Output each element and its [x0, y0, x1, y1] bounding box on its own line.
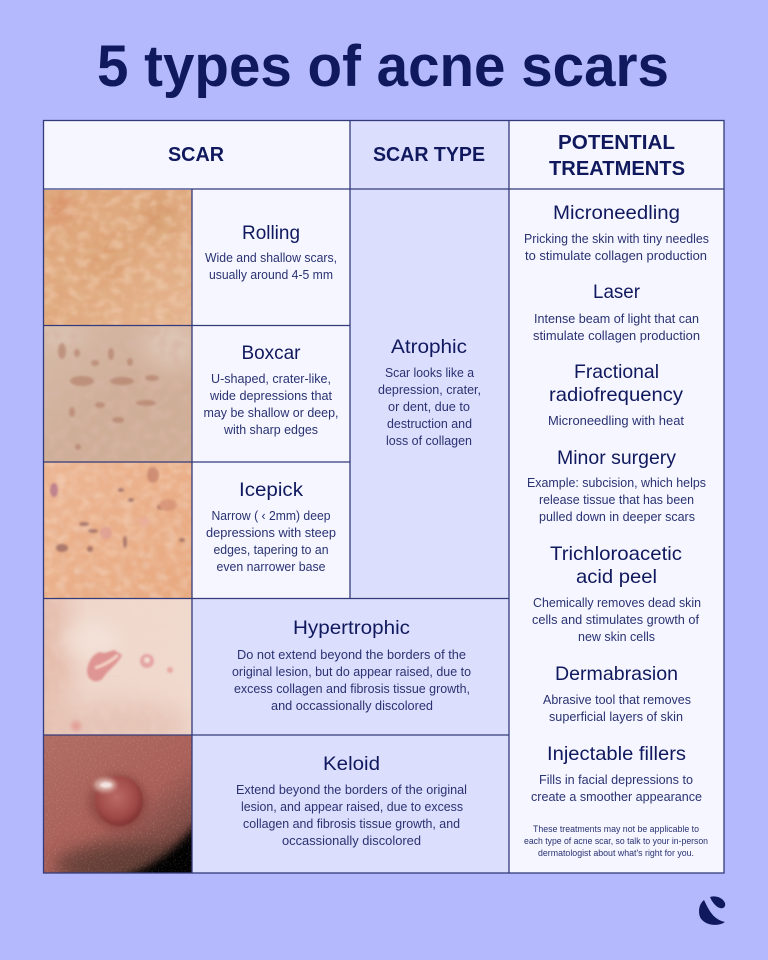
- treatment: minor surgery: release tissue that has been: [539, 493, 694, 507]
- grid lines: [43, 120, 724, 873]
- text: hypertrophic: excess collagen and fibrosis tissue growth,: [234, 682, 470, 696]
- treatment: dermabrasion: Dermabrasion: [555, 663, 678, 685]
- text: keloid: collagen and fibrosis tissue growth, and: [243, 817, 460, 831]
- text: icepick: depressions with steep: [206, 526, 336, 540]
- treatment: laser: Laser: [593, 281, 640, 303]
- header: scar type: SCAR TYPE: [373, 144, 485, 166]
- text: boxcar: U-shaped, crater-like,: [211, 372, 331, 386]
- text: hypertrophic: [232, 617, 471, 713]
- treatment: injectable fillers: create a smoother appearance: [531, 790, 702, 804]
- text: icepick: Narrow ( ‹ 2mm) deep: [212, 509, 331, 523]
- text: rolling: [205, 222, 337, 282]
- footnote: [524, 824, 708, 858]
- treatment: microneedling: Pricking the skin with tiny needles: [524, 232, 709, 246]
- text: keloid: occassionally discolored: [282, 834, 421, 848]
- treatment: trichloroacetic acid peel: Chemically removes dead skin: [533, 596, 701, 610]
- footnote: These treatments may not be applicable to: [533, 824, 699, 834]
- photo: keloid scar: [44, 736, 192, 872]
- header: potential treatments: TREATMENTS: [549, 158, 685, 180]
- text: hypertrophic: original lesion, but do appear raised, due to: [232, 665, 471, 679]
- treatment: laser: Intense beam of light that can: [534, 312, 699, 326]
- photo: hypertrophic scar: [44, 599, 192, 734]
- title: 5 types of acne scars: [97, 34, 669, 99]
- treatment: trichloroacetic acid peel: cells and stimulates growth of: [532, 613, 700, 627]
- treatment: dermabrasion: superficial layers of skin: [549, 710, 683, 724]
- header: potential treatments: [549, 132, 685, 180]
- treatment: trichloroacetic acid peel: Trichloroacetic: [550, 543, 682, 565]
- treatment: laser: stimulate collagen production: [533, 329, 700, 343]
- treatment: injectable fillers: Fills in facial depressions to: [539, 773, 693, 787]
- treatment: dermabrasion: [543, 663, 691, 724]
- treatment: laser: [533, 281, 700, 343]
- photo: rolling scar: [36, 190, 192, 326]
- treatment: microneedling: to stimulate collagen production: [525, 249, 707, 263]
- treatment: trichloroacetic acid peel: acid peel: [576, 566, 657, 588]
- header: scar: SCAR: [168, 144, 225, 166]
- header: potential treatments: POTENTIAL: [558, 132, 675, 154]
- text: atrophic: loss of collagen: [386, 434, 472, 448]
- text: rolling: Wide and shallow scars,: [205, 251, 337, 265]
- text: atrophic: [378, 336, 481, 448]
- text: icepick: edges, tapering to an: [214, 543, 329, 557]
- treatment: microneedling: Microneedling: [553, 202, 680, 224]
- cell backgrounds: [43, 120, 724, 873]
- treatment: microneedling: [524, 202, 709, 263]
- text: boxcar: Boxcar: [242, 342, 301, 364]
- treatment: dermabrasion: Abrasive tool that removes: [543, 693, 691, 707]
- text: atrophic: Atrophic: [391, 336, 467, 358]
- treatment: fractional radiofrequency: Fractional: [574, 361, 659, 383]
- text: atrophic: or dent, due to: [388, 400, 470, 414]
- text: boxcar: with sharp edges: [223, 423, 318, 437]
- photo: boxcar scar: [44, 326, 192, 462]
- treatment: minor surgery: pulled down in deeper scars: [539, 510, 695, 524]
- text: hypertrophic: Do not extend beyond the borders of the: [237, 648, 466, 662]
- treatment: minor surgery: [527, 447, 706, 524]
- treatment: injectable fillers: Injectable fillers: [547, 743, 686, 765]
- text: hypertrophic: and occassionally discolored: [271, 699, 433, 713]
- text: keloid: Extend beyond the borders of the original: [236, 783, 467, 797]
- text: icepick: [206, 479, 336, 574]
- text: rolling: Rolling: [242, 222, 300, 244]
- footnote: each type of acne scar, so talk to your in-person: [524, 836, 708, 846]
- text: boxcar: wide depressions that: [209, 389, 333, 403]
- treatment: fractional radiofrequency: radiofrequency: [549, 384, 683, 406]
- text: keloid: [236, 753, 467, 848]
- photo: icepick scar: [44, 462, 192, 599]
- text: atrophic: Scar looks like a: [385, 366, 474, 380]
- treatment: trichloroacetic acid peel: [532, 543, 701, 644]
- text: boxcar: [204, 342, 338, 437]
- text: hypertrophic: Hypertrophic: [293, 617, 410, 639]
- treatment: fractional radiofrequency: [548, 361, 685, 428]
- treatment: trichloroacetic acid peel: new skin cells: [578, 630, 655, 644]
- treatment: injectable fillers: [531, 743, 702, 804]
- text: keloid: Keloid: [323, 753, 380, 775]
- text: boxcar: may be shallow or deep,: [204, 406, 338, 420]
- text: atrophic: depression, crater,: [378, 383, 481, 397]
- footnote: dermatologist about what's right for you.: [538, 848, 694, 858]
- text: icepick: even narrower base: [216, 560, 326, 574]
- logo: [699, 896, 725, 925]
- text: rolling: usually around 4-5 mm: [209, 268, 333, 282]
- text: keloid: lesion, and appear raised, due to excess: [241, 800, 463, 814]
- text: icepick: Icepick: [239, 479, 303, 501]
- treatment: fractional radiofrequency: Microneedling with heat: [548, 414, 685, 428]
- treatment: minor surgery: Example: subcision, which helps: [527, 476, 706, 490]
- text: atrophic: destruction and: [387, 417, 472, 431]
- table: [32, 120, 724, 887]
- treatment: minor surgery: Minor surgery: [557, 447, 676, 469]
